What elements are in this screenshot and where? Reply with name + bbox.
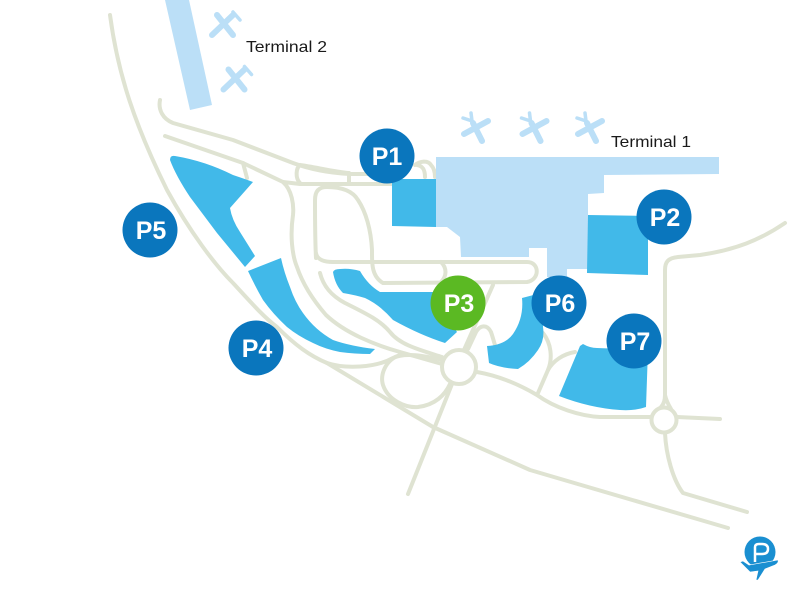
road network (110, 15, 785, 528)
marker: P2 (636, 190, 692, 244)
icon: plane, terminal 2 lower (224, 66, 252, 90)
marker: P6 (532, 276, 586, 330)
marker: P3 (430, 276, 486, 330)
marker: P3: P3 (444, 290, 474, 318)
parking area: P6 (487, 292, 545, 369)
marker: P2: P2 (650, 204, 680, 232)
parking area: P2 (587, 215, 648, 275)
parking area: P1 (392, 179, 436, 227)
icon: plane, terminal 2 upper (212, 12, 240, 35)
icon: parking plane logo (740, 536, 778, 580)
marker: P4: P4 (242, 335, 272, 363)
icon: plane, terminal 1 right (577, 113, 602, 141)
marker: P1 (360, 128, 414, 184)
parking area: P5 (170, 156, 255, 267)
label: Terminal 1: Terminal 1 (611, 134, 691, 151)
parking area: P4 (248, 258, 375, 354)
marker: P5: P5 (136, 217, 166, 245)
label: Terminal 2: Terminal 2 (246, 39, 327, 56)
terminal 1 building (436, 157, 719, 277)
marker: P4 (228, 320, 284, 376)
marker: P6: P6 (545, 290, 575, 318)
icon: plane, terminal 1 left (463, 113, 488, 141)
marker: P7: P7 (620, 328, 650, 356)
terminal 2 building (165, 0, 212, 110)
parking area: P3 (333, 269, 457, 343)
marker: P5 (122, 202, 178, 258)
parking area: P7 (559, 344, 648, 410)
icon: plane, terminal 1 middle (522, 113, 546, 141)
marker: P7 (606, 314, 662, 368)
marker: P1: P1 (372, 143, 402, 171)
